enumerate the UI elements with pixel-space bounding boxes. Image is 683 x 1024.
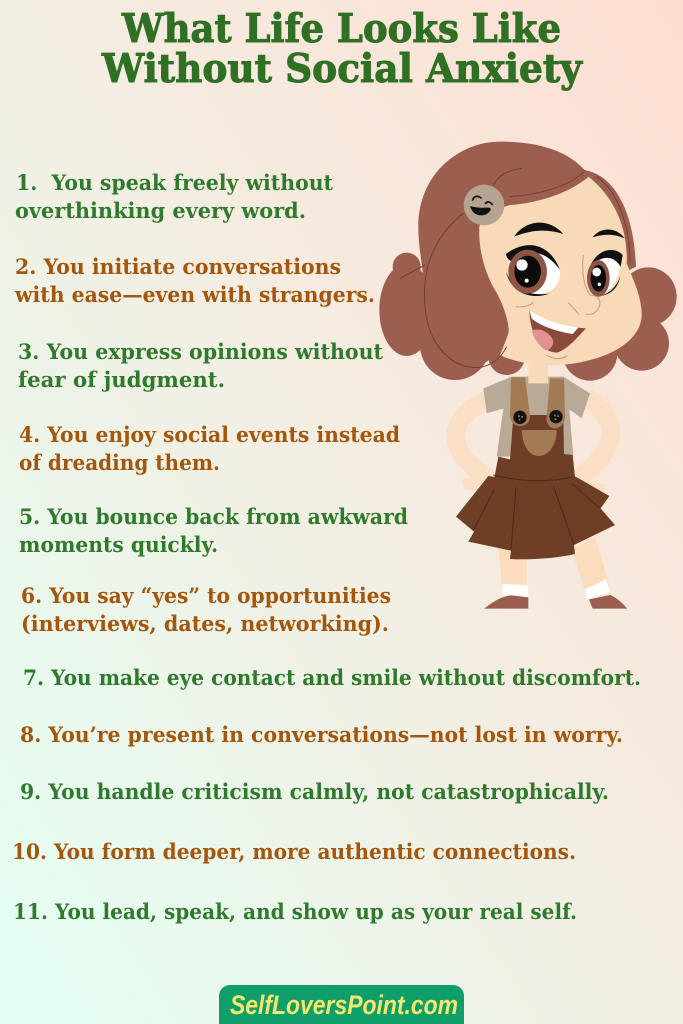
list item 1 — [15, 170, 333, 223]
list item 5: 5. You bounce back from awkward — [19, 504, 408, 529]
list item 9: 9. You handle criticism calmly, not catastrophically. — [20, 779, 609, 804]
list item 6: (interviews, dates, networking). — [21, 611, 389, 636]
list item 3: fear of judgment. — [18, 367, 225, 392]
title: What Life Looks Like — [121, 6, 561, 52]
website badge — [219, 985, 464, 1024]
list item 2 — [14, 254, 375, 307]
list item 3: 3. You express opinions without — [18, 339, 383, 364]
list item 4: of dreading them. — [19, 450, 220, 475]
list item 10: 10. You form deeper, more authentic connections. — [12, 839, 576, 864]
character illustration: girl — [379, 142, 677, 609]
list item 1: overthinking every word. — [15, 198, 306, 223]
list item 1: 1. You speak freely without — [16, 170, 333, 195]
list item 6: 6. You say “yes” to opportunities — [21, 583, 391, 608]
character head — [379, 142, 677, 383]
list item 4: 4. You enjoy social events instead — [19, 422, 400, 447]
list item 7: 7. You make eye contact and smile without discomfort. — [23, 665, 641, 690]
title — [101, 6, 583, 92]
list item 5 — [19, 504, 408, 557]
list item 3 — [18, 339, 383, 392]
list item 4 — [19, 422, 400, 475]
title: Without Social Anxiety — [101, 46, 583, 92]
list item 11: 11. You lead, speak, and show up as your real self. — [13, 899, 577, 924]
character body — [456, 377, 627, 609]
list item 5: moments quickly. — [19, 532, 218, 557]
list item 6 — [21, 583, 391, 636]
list item 2: 2. You initiate conversations — [15, 254, 341, 279]
list item 2: with ease—even with strangers. — [14, 282, 375, 307]
list item 8: 8. You’re present in conversations—not lost in worry. — [20, 722, 623, 747]
website badge: SelfLoversPoint.com — [230, 990, 458, 1020]
